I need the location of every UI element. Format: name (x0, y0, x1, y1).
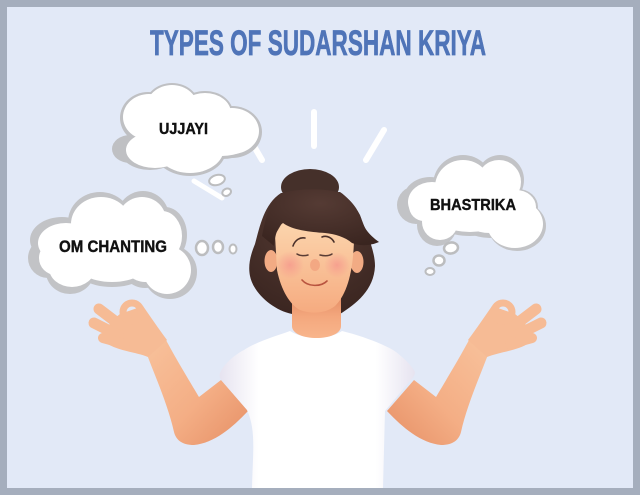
thought bubble: Om Chanting (28, 191, 236, 299)
thought dots (208, 173, 226, 187)
thought bubble: Bhastrika (397, 155, 546, 275)
right arm and hand (387, 303, 541, 445)
label: OM CHANTING (59, 238, 167, 256)
label: UJJAYI (159, 121, 208, 138)
thought bubble: Ujjayi (112, 83, 262, 197)
hair back (249, 192, 375, 314)
t-shirt (220, 331, 415, 488)
closed eyes (297, 254, 332, 256)
label: BHASTRIKA (430, 197, 516, 214)
ears (264, 250, 278, 272)
hair fringe (262, 189, 379, 246)
cloud fill (123, 85, 259, 173)
smile (302, 280, 327, 285)
thought dots (443, 241, 459, 255)
nose (310, 259, 320, 271)
hair bun (281, 169, 339, 205)
left arm and hand (94, 303, 248, 445)
cloud rim (28, 191, 197, 299)
face (275, 218, 354, 313)
rays around the head (194, 112, 384, 198)
cloud fill (38, 197, 191, 294)
cloud rim (112, 83, 262, 176)
neck (292, 296, 341, 338)
woman meditating (94, 169, 541, 488)
cheeks (276, 251, 304, 279)
thought dots (196, 241, 208, 255)
cloud rim (397, 155, 546, 251)
eyebrows (293, 236, 334, 246)
cloud fill (408, 160, 543, 248)
